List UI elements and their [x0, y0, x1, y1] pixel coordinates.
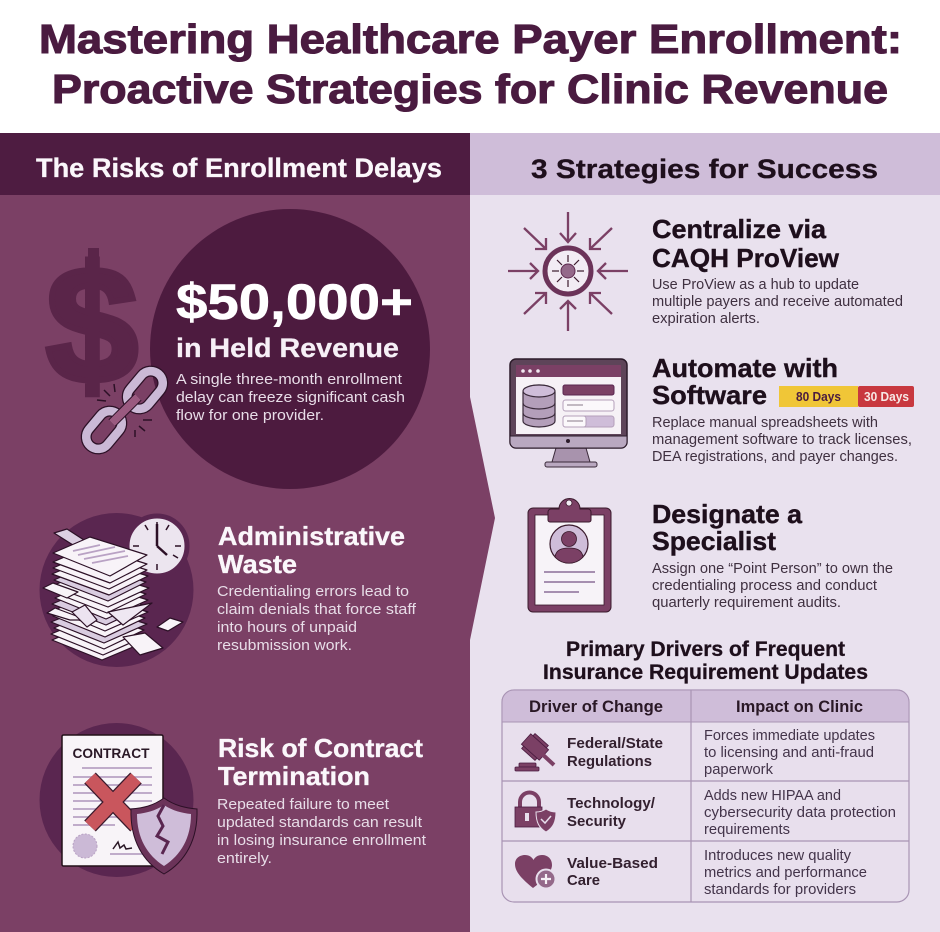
- row: regulations: to licensing and anti-fraud: [704, 745, 874, 761]
- stat circle: [150, 209, 430, 489]
- description: into hours of unpaid: [217, 619, 357, 636]
- heading: Risk of Contract: [218, 733, 423, 763]
- heading: Centralize via: [652, 214, 827, 244]
- panel: automate: [510, 353, 914, 467]
- row: technology: requirements: [704, 822, 790, 838]
- description: Use ProView as a hub to update: [652, 277, 859, 293]
- heading: Designate a: [652, 499, 803, 529]
- heading: risks: The Risks of Enrollment Delays: [36, 153, 442, 183]
- progress badge: days: 80 Days: [796, 390, 841, 404]
- heading: Automate with: [652, 353, 838, 383]
- progress badge: days: [779, 386, 914, 407]
- stat: amount: $50,000+: [176, 274, 413, 330]
- row: regulations: Federal/State: [567, 735, 663, 752]
- table header: Impact on Clinic: [736, 698, 863, 716]
- description: claim denials that force staff: [217, 601, 417, 618]
- heading: Administrative: [218, 521, 405, 551]
- heading: Waste: [218, 549, 297, 579]
- icon: voided contract and broken shield: [40, 723, 197, 877]
- description: Assign one “Point Person” to own the: [652, 561, 893, 577]
- description: DEA registrations, and payer changes.: [652, 449, 898, 465]
- row: technology: cybersecurity data protection: [704, 805, 896, 821]
- heading: strategies: 3 Strategies for Success: [531, 154, 878, 184]
- table header: [502, 690, 909, 722]
- icon: lock with shield: [515, 792, 556, 832]
- description: Repeated failure to meet: [217, 796, 390, 813]
- heading: risks: [0, 133, 470, 195]
- description: resubmission work.: [217, 637, 352, 654]
- stat: description: [176, 371, 405, 424]
- row: value-based care: Care: [567, 872, 600, 889]
- description: [652, 277, 903, 327]
- stat: description: delay can freeze significant cash: [176, 389, 405, 406]
- heading: [218, 733, 423, 791]
- row: technology: Adds new HIPAA and: [704, 788, 841, 804]
- stat: label: in Held Revenue: [176, 333, 399, 363]
- heading: Termination: [218, 761, 370, 791]
- table header: Driver of Change: [529, 698, 663, 716]
- panel: designate: [528, 499, 893, 612]
- row: regulations: Regulations: [567, 753, 652, 770]
- row: value-based care: [515, 848, 867, 898]
- row: regulations: [515, 728, 875, 778]
- heading: [652, 353, 838, 410]
- icon: paper stack and clock: [40, 513, 194, 667]
- row: regulations: Forces immediate updates: [704, 728, 875, 744]
- row: value-based care: Value-Based: [567, 855, 658, 872]
- description: [652, 561, 893, 611]
- heading: Specialist: [652, 526, 776, 556]
- heading: CAQH ProView: [652, 243, 840, 273]
- description: [217, 583, 417, 654]
- heading: [218, 521, 405, 579]
- heading: [652, 499, 803, 556]
- description: in losing insurance enrollment: [217, 832, 427, 849]
- description: quarterly requirement audits.: [652, 595, 841, 611]
- table heading: [543, 638, 868, 684]
- heading: Software: [652, 380, 767, 410]
- icon: broken chain: [81, 366, 168, 454]
- table heading: Primary Drivers of Frequent: [566, 638, 845, 661]
- icon: clipboard with person: [528, 499, 611, 612]
- heading: [652, 214, 840, 273]
- icon: gavel: [515, 734, 554, 771]
- description: expiration alerts.: [652, 311, 760, 327]
- row: value-based care: Introduces new quality: [704, 848, 852, 864]
- description: [217, 796, 427, 867]
- description: credentialing process and conduct: [652, 578, 877, 594]
- icon: voided contract and broken shield: CONTRACT: [72, 745, 150, 761]
- panel: administrative waste: [40, 513, 417, 667]
- description: management software to track licenses,: [652, 432, 912, 448]
- title: [39, 16, 902, 112]
- description: multiple payers and receive automated: [652, 294, 903, 310]
- row: technology: [515, 788, 896, 838]
- row: value-based care: standards for providers: [704, 882, 856, 898]
- row: technology: Security: [567, 813, 627, 830]
- row: regulations: paperwork: [704, 762, 774, 778]
- table: drivers of change: [502, 690, 909, 902]
- table heading: Insurance Requirement Updates: [543, 661, 868, 684]
- row: value-based care: metrics and performance: [704, 865, 867, 881]
- description: entirely.: [217, 850, 272, 867]
- icon: dollar sign: $: [46, 233, 138, 417]
- description: Replace manual spreadsheets with: [652, 415, 878, 431]
- icon: heart with plus: [515, 855, 556, 888]
- description: updated standards can result: [217, 814, 423, 831]
- panel: contract termination: [40, 723, 427, 877]
- icon: converging arrows hub: [508, 212, 628, 331]
- row: technology: Technology/: [567, 795, 656, 812]
- panel: strategies background: [470, 133, 940, 932]
- panel: risks background: [0, 133, 495, 932]
- stat: description: A single three-month enrollment: [176, 371, 403, 388]
- description: [652, 415, 912, 465]
- icon: monitor with database: [510, 359, 627, 467]
- panel: centralize: [508, 212, 903, 331]
- title: Mastering Healthcare Payer Enrollment:: [39, 16, 902, 62]
- heading: strategies: [470, 133, 940, 195]
- title: Proactive Strategies for Clinic Revenue: [52, 66, 888, 112]
- description: Credentialing errors lead to: [217, 583, 409, 600]
- stat: description: flow for one provider.: [176, 407, 324, 424]
- progress badge: days: 30 Days: [864, 390, 909, 404]
- panel: held revenue: [46, 209, 430, 489]
